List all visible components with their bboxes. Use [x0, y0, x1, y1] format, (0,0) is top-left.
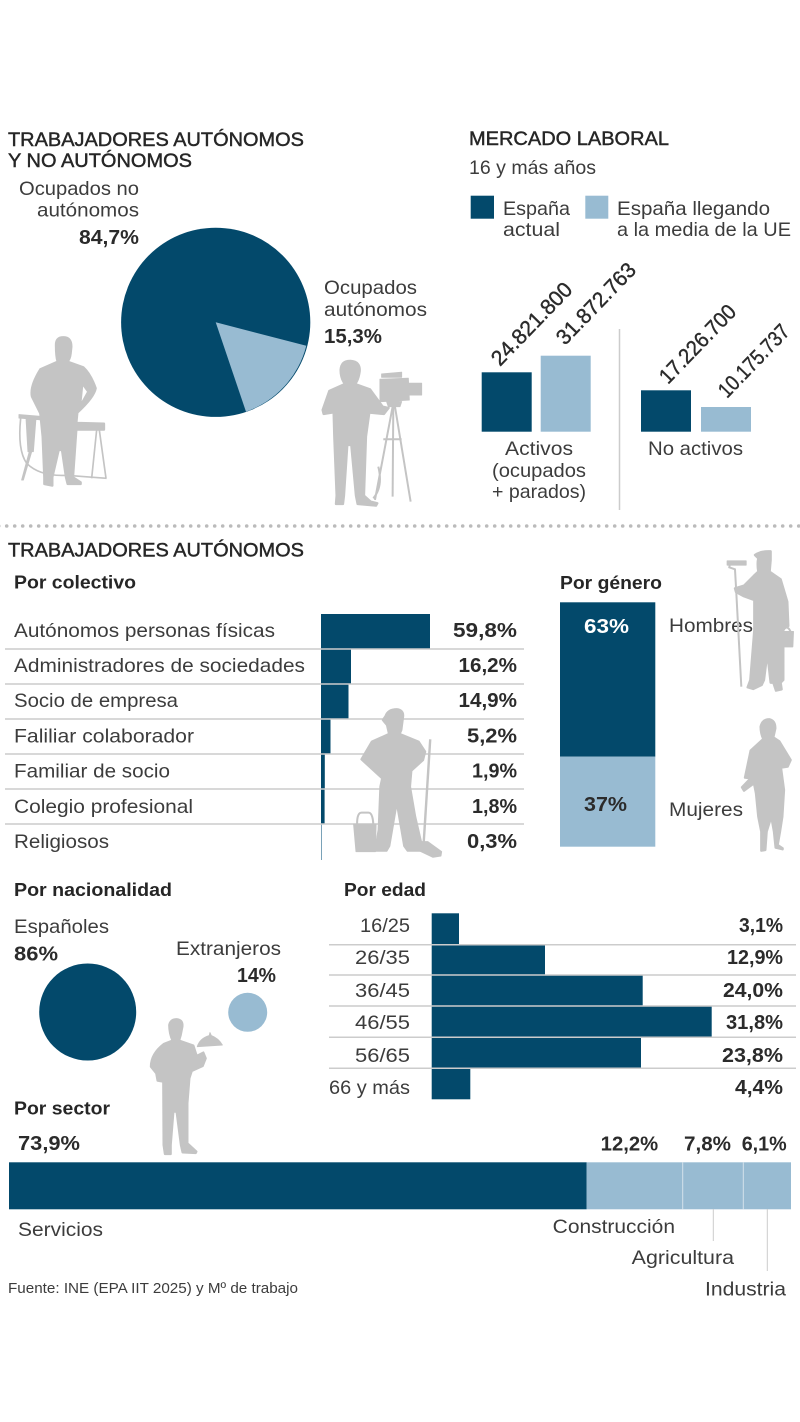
heading: trabajadores autónomos y no autónomos: Y NO AUTÓNOMOS: [8, 149, 192, 172]
row values: 1,8%: [472, 796, 517, 818]
subheading: por edad: Por edad: [344, 879, 426, 900]
row values: 24,0%: [723, 980, 783, 1002]
heading: mercado laboral: MERCADO LABORAL: [469, 128, 669, 150]
stacked bar: género: 37%: [584, 794, 627, 816]
bar chart: activos: 31.872.763: [551, 258, 641, 349]
label: ocupados autónomos: Ocupados: [324, 277, 417, 299]
row values: 5,2%: [467, 725, 517, 747]
label: ocupados autónomos: [324, 277, 427, 348]
bar chart: activos: (ocupados: [492, 460, 586, 482]
label: ocupados no autónomos: 84,7%: [79, 227, 139, 249]
label: mujeres: Mujeres: [669, 799, 743, 821]
row labels: Administradores de sociedades: [14, 655, 305, 677]
stacked bar: género: 63%: [584, 616, 629, 638]
row labels: 16/25: [360, 915, 410, 937]
bar chart: activos: 24.821.800: [486, 278, 577, 370]
row labels: 26/35: [355, 947, 410, 969]
subheading: por colectivo: Por colectivo: [14, 572, 136, 592]
pie chart: [121, 228, 310, 417]
sector values: 12,2%: [601, 1134, 658, 1156]
row values: 4,4%: [735, 1077, 783, 1099]
subheading: por sector: Por sector: [14, 1098, 110, 1118]
label: españoles: 86%: [14, 944, 58, 966]
heading: trabajadores autónomos: TRABAJADORES AUTÓNOMOS: [8, 538, 304, 562]
panel: por colectivo: [5, 572, 524, 860]
heading: trabajadores autónomos y no autónomos: TRABAJADORES AUTÓNOMOS: [8, 128, 304, 151]
subheading: por género: Por género: [560, 572, 662, 593]
row values: 12,9%: [727, 947, 783, 969]
row labels: [329, 915, 410, 1099]
bar chart: activos: [482, 258, 641, 503]
stacked bar: género: [560, 602, 655, 847]
label: ocupados autónomos: autónomos: [324, 299, 427, 321]
row labels: Autónomos personas físicas: [14, 620, 275, 642]
sector labels: Construcción: [553, 1216, 675, 1238]
bubble: extranjeros: [228, 993, 267, 1032]
label: extranjeros: 14%: [237, 965, 276, 987]
sector labels: Industria: [705, 1278, 786, 1300]
row labels: 66 y más: [329, 1077, 410, 1099]
label: ocupados no autónomos: autónomos: [37, 200, 139, 222]
row labels: 36/45: [355, 980, 410, 1002]
row values: 23,8%: [722, 1045, 783, 1067]
legend: [471, 196, 791, 241]
panel: por nacionalidad: [14, 879, 281, 1154]
panel: mercado laboral: [469, 128, 795, 510]
legend: España llegando: [617, 198, 770, 220]
label: ocupados autónomos: 15,3%: [324, 326, 382, 348]
bar chart: no activos: 17.226.700: [654, 300, 741, 388]
panel: por edad: [329, 879, 796, 1099]
row values: 14,9%: [458, 690, 517, 712]
leader lines: [713, 1209, 767, 1271]
icon: waiter with tray: [151, 1019, 222, 1154]
sector values: 7,8%: [684, 1134, 731, 1156]
bars: [432, 913, 712, 1099]
label: extranjeros: [176, 938, 281, 987]
icon: worker with jackhammer: [19, 337, 107, 486]
sector values: [18, 1133, 787, 1156]
label: hombres: Hombres: [669, 615, 753, 637]
label: ocupados no autónomos: [19, 178, 139, 249]
row values: [453, 620, 517, 853]
row values: 3,1%: [739, 915, 783, 937]
bar chart: activos: + parados): [492, 481, 586, 503]
sector labels: Servicios: [18, 1219, 103, 1241]
subtitle: 16 y más años: 16 y más años: [469, 157, 596, 179]
row labels: Faliliar colaborador: [14, 725, 195, 747]
row labels: 56/65: [355, 1045, 410, 1067]
stacked bar: sectores: [9, 1162, 791, 1209]
bar chart: activos: Activos: [505, 438, 573, 460]
row values: 0,3%: [467, 831, 517, 853]
row values: 1,9%: [472, 761, 517, 783]
row labels: Familiar de socio: [14, 761, 170, 783]
divider: [618, 329, 620, 510]
sector labels: [18, 1216, 786, 1300]
row values: [722, 915, 783, 1099]
subheading: por nacionalidad: Por nacionalidad: [14, 879, 172, 900]
label: extranjeros: Extranjeros: [176, 938, 281, 960]
label: españoles: [14, 916, 109, 966]
row labels: Colegio profesional: [14, 796, 193, 818]
bars: [321, 614, 430, 860]
legend: actual: [503, 219, 560, 241]
panel: por género: [560, 551, 793, 851]
row values: 16,2%: [458, 655, 517, 677]
heading: trabajadores autónomos y no autónomos: [8, 128, 304, 172]
icon: cleaner with mop and bucket: [354, 709, 442, 857]
row labels: Religiosos: [14, 831, 109, 853]
bar chart: no activos: No activos: [648, 438, 743, 460]
sector values: 73,9%: [18, 1133, 80, 1155]
label: españoles: Españoles: [14, 916, 109, 938]
bar chart: no activos: [641, 300, 795, 460]
icon: woman on the phone: [742, 719, 791, 851]
icon: camera operator: [323, 361, 422, 506]
icon: painter with roller: [727, 551, 793, 691]
row values: 59,8%: [453, 620, 517, 642]
label: ocupados no autónomos: Ocupados no: [19, 178, 139, 200]
panel: por sector: [9, 1098, 791, 1300]
row labels: [14, 620, 305, 853]
row labels: Socio de empresa: [14, 690, 178, 712]
row values: 31,8%: [726, 1012, 783, 1034]
legend: a la media de la UE: [617, 219, 791, 241]
sector labels: Agricultura: [632, 1247, 734, 1269]
legend: España: [503, 198, 570, 220]
sector values: 6,1%: [742, 1134, 787, 1156]
row labels: 46/55: [355, 1012, 410, 1034]
panel: trabajadores autónomos y no autónomos: [8, 128, 427, 506]
bubble: españoles: [39, 964, 136, 1060]
source note: Fuente: INE (EPA IIT 2025) y Mº de trabajo: [8, 1280, 298, 1297]
